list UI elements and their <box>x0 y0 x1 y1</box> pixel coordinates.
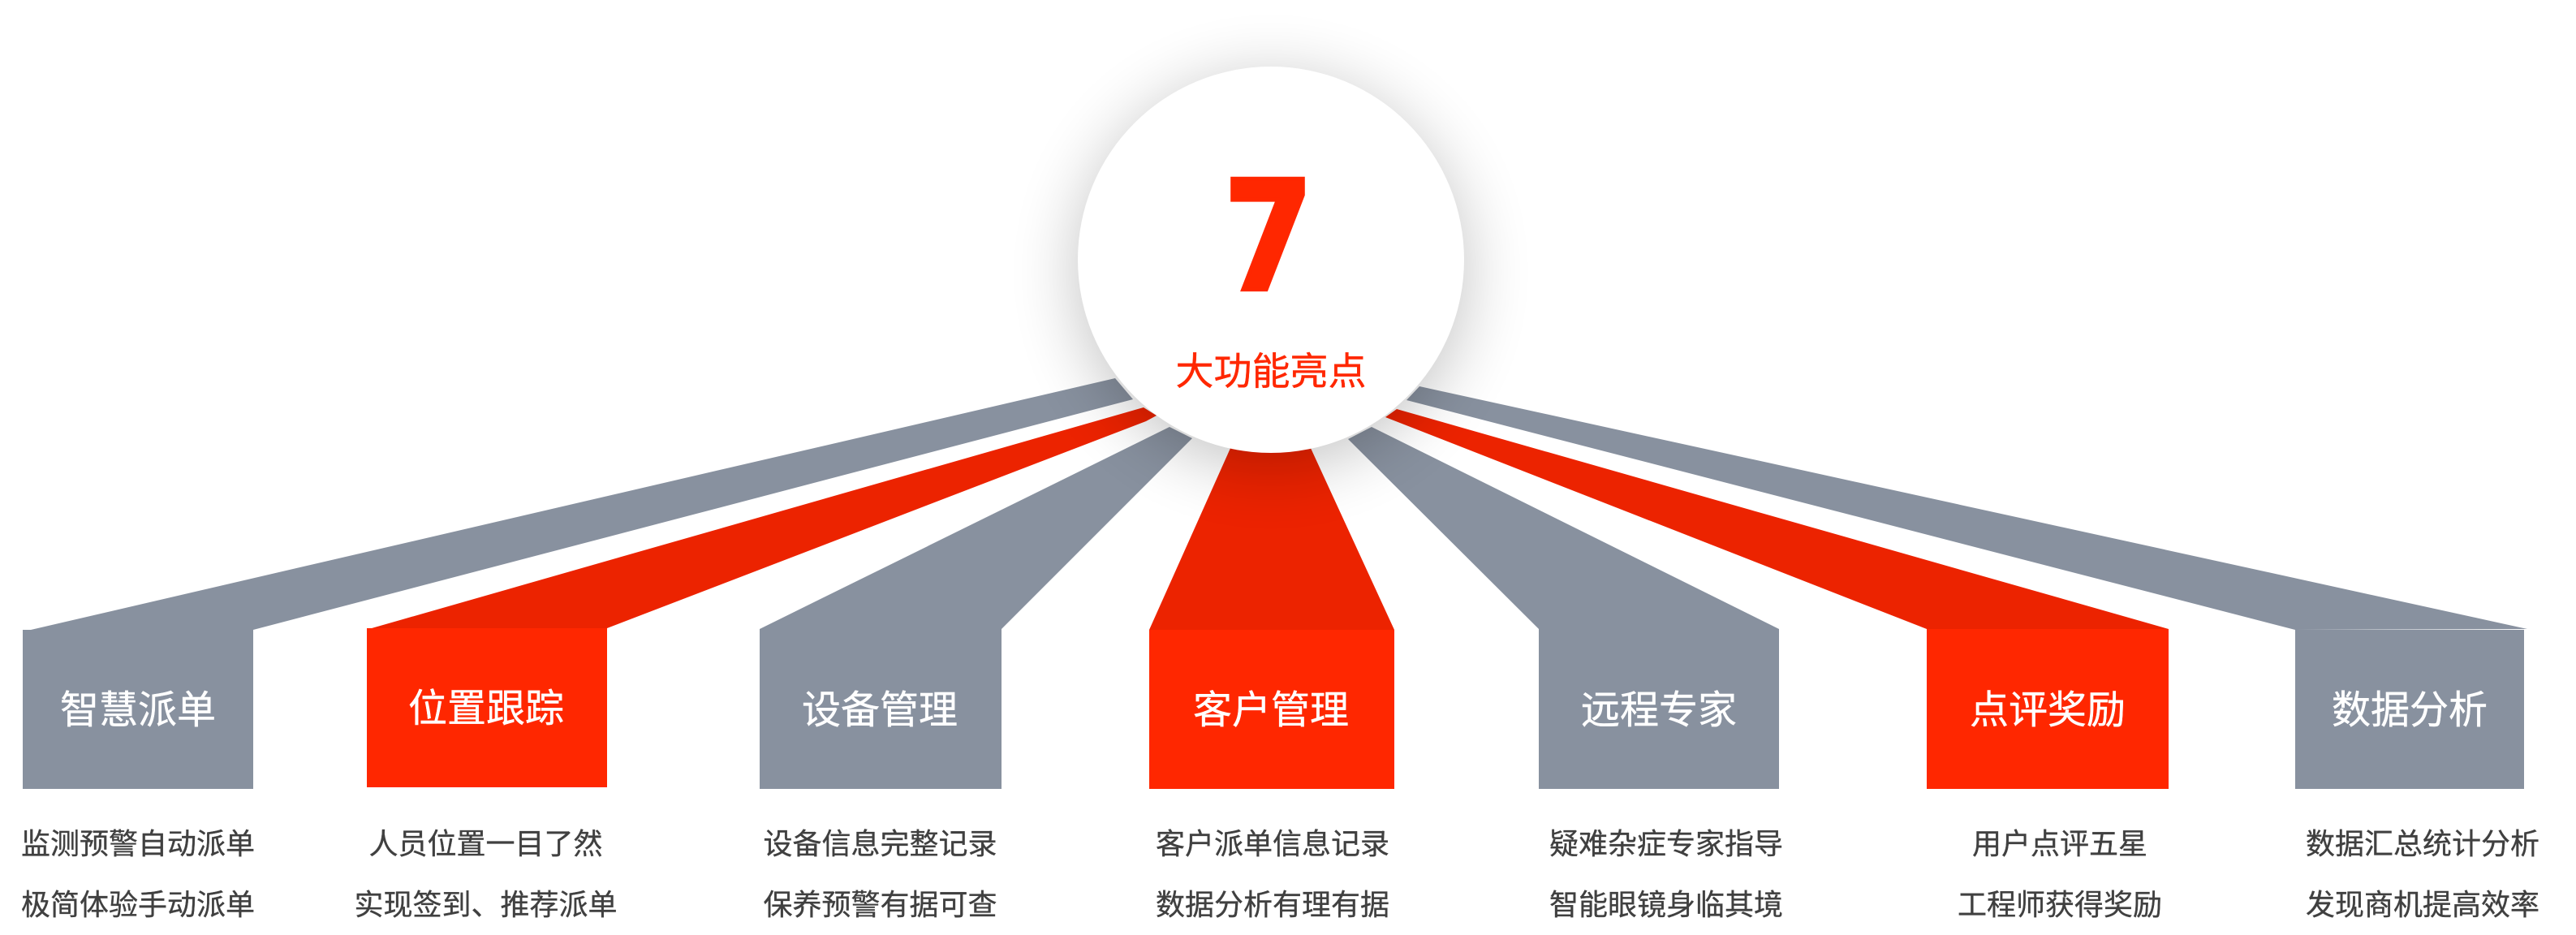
description: 疑难杂症专家指导 <box>1549 827 1783 860</box>
description: 保养预警有据可查 <box>763 888 997 921</box>
heading: 点评奖励 <box>1970 689 2126 732</box>
description: 发现商机提高效率 <box>2306 888 2539 921</box>
band: connector to 数据分析 <box>1406 386 2527 630</box>
description <box>354 827 618 921</box>
description: 客户派单信息记录 <box>1156 827 1389 860</box>
description <box>21 827 255 921</box>
band: connector to 设备管理 <box>760 427 1192 629</box>
heading: 智慧派单 <box>60 689 216 732</box>
panel: 位置跟踪 <box>354 628 618 921</box>
band: connector to 客户管理 <box>1149 446 1394 630</box>
circle shadow <box>1078 79 1464 465</box>
band: connector to 智慧派单 <box>31 378 1133 630</box>
description: 工程师获得奖励 <box>1958 888 2162 921</box>
center subtitle: 大功能亮点 <box>1175 350 1367 393</box>
description: 极简体验手动派单 <box>21 888 255 921</box>
heading: 远程专家 <box>1581 689 1737 732</box>
heading: 数据分析 <box>2332 689 2488 732</box>
band: connector to 远程专家 <box>1348 427 1779 629</box>
band: connector to 点评奖励 <box>1385 409 2169 629</box>
description: 实现签到、推荐派单 <box>354 888 618 921</box>
description: 人员位置一目了然 <box>368 827 603 860</box>
description: 数据分析有理有据 <box>1156 888 1389 921</box>
central circle <box>1078 67 1464 453</box>
panel: 客户管理 <box>1149 630 1394 921</box>
heading: 设备管理 <box>802 689 958 732</box>
panel: 设备管理 <box>760 629 1002 921</box>
heading: 客户管理 <box>1193 689 1349 732</box>
band: connector to 位置跟踪 <box>372 407 1157 628</box>
big number 7: 7 <box>1224 149 1313 325</box>
panel: 智慧派单 <box>21 630 255 921</box>
description: 数据汇总统计分析 <box>2306 827 2539 860</box>
description: 用户点评五星 <box>1972 827 2147 860</box>
description <box>1549 827 1783 921</box>
panel: 数据分析 <box>2295 630 2539 921</box>
description <box>1958 827 2162 921</box>
description: 设备信息完整记录 <box>763 827 997 860</box>
panel: 远程专家 <box>1539 629 1783 921</box>
description <box>1156 827 1389 921</box>
heading: 位置跟踪 <box>408 687 564 730</box>
description <box>763 827 997 921</box>
description <box>2306 827 2539 921</box>
panel: 点评奖励 <box>1927 629 2169 921</box>
description: 监测预警自动派单 <box>21 827 255 860</box>
description: 智能眼镜身临其境 <box>1549 888 1783 921</box>
